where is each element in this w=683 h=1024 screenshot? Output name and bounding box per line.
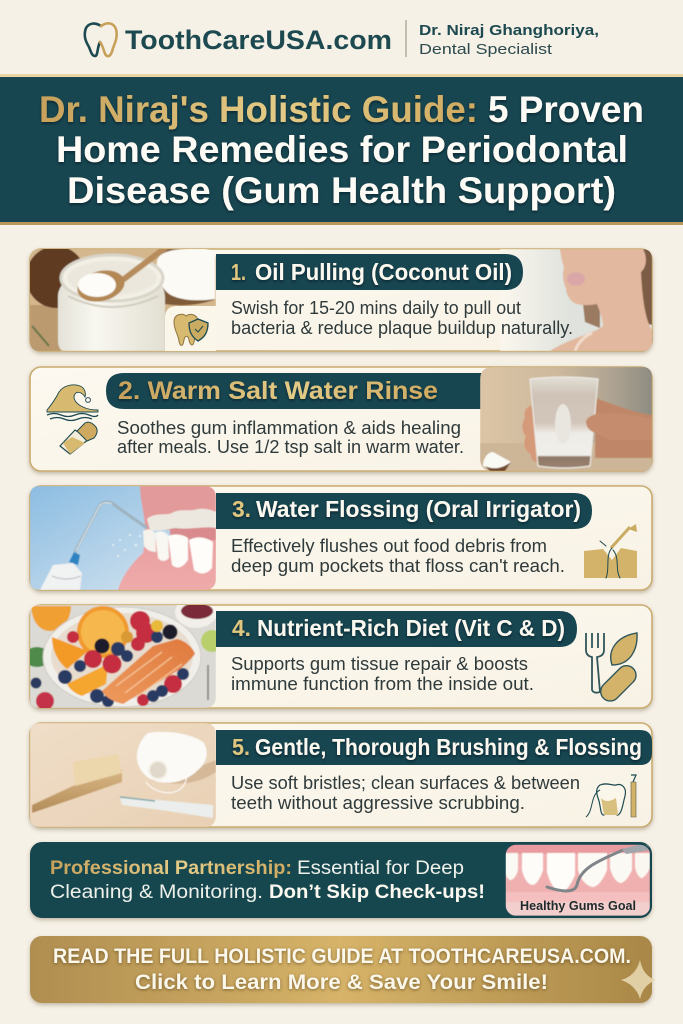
description: Effectively flushes out food debris from xyxy=(231,535,547,556)
heading bar xyxy=(216,254,523,290)
callout text: Don’t Skip Check-ups! xyxy=(269,882,485,903)
heading: Nutrient-Rich Diet (Vit C & D) xyxy=(257,615,565,641)
cta text xyxy=(53,945,631,994)
title text xyxy=(39,89,644,211)
photo: salmon and fruit bowl xyxy=(30,605,216,708)
header divider xyxy=(406,20,407,57)
panel: 4 nutrient-rich diet xyxy=(24,596,652,710)
callout text: Cleaning & Monitoring. xyxy=(50,882,263,903)
title text: Disease (Gum Health Support) xyxy=(67,170,616,211)
heading: 2. Warm Salt Water Rinse xyxy=(118,377,438,405)
panel: 3 water flossing xyxy=(30,486,652,590)
photo: woman swishing xyxy=(500,249,652,351)
author credit: Dr. Niraj Ghanghoriya, xyxy=(419,22,599,39)
image border xyxy=(505,844,651,916)
description xyxy=(231,772,580,813)
logo wordmark: ToothCareUSA.com xyxy=(125,25,392,55)
author credit: Dental Specialist xyxy=(419,41,553,58)
icon: water jet in gum pocket xyxy=(584,524,637,578)
photo: glass of salt water xyxy=(480,367,652,471)
description xyxy=(117,417,464,457)
heading bar xyxy=(216,493,592,529)
photo: healthy gums xyxy=(505,842,650,916)
heading: 4. xyxy=(232,615,251,641)
heading bar xyxy=(216,611,577,647)
title text: Dr. Niraj's Holistic Guide: xyxy=(39,89,478,130)
panel: 5 gentle brushing and flossing xyxy=(30,723,652,827)
icon: tooth shield tile xyxy=(165,306,216,351)
description xyxy=(231,535,565,576)
heading: 5. xyxy=(232,734,250,760)
description: teeth without aggressive scrubbing. xyxy=(231,792,525,813)
description xyxy=(231,653,534,694)
description: immune function from the inside out. xyxy=(231,673,534,694)
callout text xyxy=(50,858,485,903)
panel: 1 oil pulling xyxy=(26,246,652,351)
icon: fork leaf capsule xyxy=(586,633,640,705)
title text: Home Remedies for Periodontal xyxy=(56,129,628,170)
photo: coconut oil jar xyxy=(26,246,216,351)
callout text: Professional Partnership: xyxy=(50,858,292,879)
author credit xyxy=(419,22,599,58)
description: deep gum pockets that floss can't reach. xyxy=(231,555,565,576)
heading: 1. xyxy=(231,259,246,285)
icon: tooth floss and pick xyxy=(586,775,636,817)
cta text: Click to Learn More & Save Your Smile! xyxy=(135,971,548,994)
photo caption: Healthy Gums Goal xyxy=(520,898,636,913)
heading: Gentle, Thorough Brushing & Flossing xyxy=(255,734,642,760)
icon: tooth logo xyxy=(85,23,117,56)
panel: professional partnership xyxy=(30,842,652,918)
photo: toothbrush and floss xyxy=(30,723,216,827)
description: Use soft bristles; clean surfaces & between xyxy=(231,772,580,793)
description: bacteria & reduce plaque buildup naturally. xyxy=(231,317,573,338)
header xyxy=(85,20,599,58)
call to action xyxy=(30,936,656,1003)
icon: sparkle xyxy=(621,960,656,999)
heading bar xyxy=(216,730,652,765)
heading bar xyxy=(106,373,486,409)
description: Soothes gum inflammation & aids healing xyxy=(117,417,461,438)
title banner xyxy=(0,74,683,225)
cta text: READ THE FULL HOLISTIC GUIDE AT TOOTHCAREUSA.COM. xyxy=(53,945,631,968)
description xyxy=(231,297,573,338)
panel: 2 warm salt water rinse xyxy=(30,367,652,471)
heading: Water Flossing (Oral Irrigator) xyxy=(256,496,581,522)
description: Supports gum tissue repair & boosts xyxy=(231,653,528,674)
heading: Oil Pulling (Coconut Oil) xyxy=(255,259,512,285)
icon: wave xyxy=(47,385,98,420)
description: Swish for 15-20 mins daily to pull out xyxy=(231,297,521,318)
photo: water flosser and teeth xyxy=(30,486,216,590)
description: after meals. Use 1/2 tsp salt in warm water. xyxy=(117,436,464,457)
heading: 3. xyxy=(232,496,251,522)
callout text: Essential for Deep xyxy=(297,858,464,879)
title text: 5 Proven xyxy=(488,89,644,130)
icon: salt shaker xyxy=(60,422,97,454)
